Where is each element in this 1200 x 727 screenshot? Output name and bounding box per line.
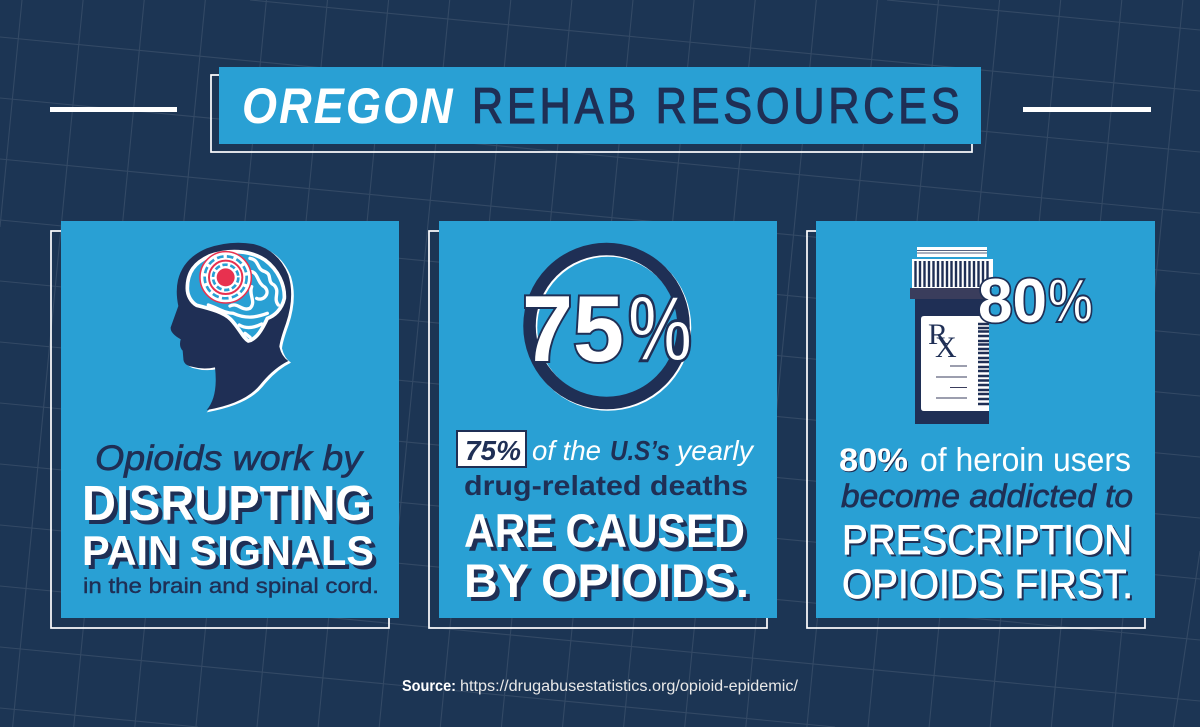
icon: prescription bottle <box>910 247 993 424</box>
text: are caused by opioids: ARE CAUSED <box>464 504 745 557</box>
text: disrupting pain signals: DISRUPTING <box>82 477 372 531</box>
icon: prescription bottle: R <box>928 318 948 351</box>
text: of the U.S's yearly <box>532 435 755 466</box>
title: Rehab Resources: REHAB RESOURCES <box>472 78 960 134</box>
left title rule <box>50 107 177 112</box>
source line: Source: <box>402 678 456 695</box>
source line: https://drugabusestatistics.org/opioid-epidemic/ <box>460 678 799 695</box>
big stat: 75%: 75 <box>522 276 624 381</box>
title: Oregon: OREGON <box>242 79 454 135</box>
text: are caused by opioids: BY OPIOIDS. <box>464 554 749 607</box>
ring graphic <box>530 249 685 404</box>
text: 80% of heroin users: of heroin users <box>920 441 1131 478</box>
big stat: 75% <box>522 276 692 381</box>
text: opioids work by: Opioids work by <box>95 439 365 478</box>
big stat: 80% <box>978 267 1093 336</box>
text: prescription opioids first: OPIOIDS FIRST. <box>842 561 1133 607</box>
icon: head with brain <box>171 243 294 412</box>
panel: disrupting pain signals <box>51 221 399 628</box>
icon: prescription bottle: X <box>935 331 957 364</box>
text: 80% of heroin users: 80% <box>839 442 908 478</box>
big stat: 80%: % <box>1048 267 1093 336</box>
text: of the U.S's yearly: U.S’s <box>610 435 670 466</box>
highlighted 75% box: 75% <box>465 435 521 466</box>
big stat: 75%: % <box>628 276 692 381</box>
title banner <box>211 67 981 152</box>
text: of the U.S's yearly: yearly <box>675 435 755 466</box>
text: drug-related deaths: drug-related deaths <box>464 470 748 501</box>
text: are caused by opioids <box>464 504 749 607</box>
text: prescription opioids first <box>842 516 1133 607</box>
text: disrupting pain signals <box>82 477 374 574</box>
panel: 75 percent of deaths <box>429 221 777 628</box>
text: in the brain and spinal cord: in the brain and spinal cord. <box>83 575 379 598</box>
right title rule <box>1023 107 1151 112</box>
big stat: 80%: 80 <box>978 267 1047 336</box>
panel: 80 percent of heroin users <box>807 221 1155 628</box>
highlighted 75% box <box>457 431 526 467</box>
text: of the U.S's yearly: of the <box>532 435 601 466</box>
text: become addicted to: become addicted to <box>841 478 1133 514</box>
text: prescription opioids first: PRESCRIPTION <box>842 516 1132 563</box>
text: disrupting pain signals: PAIN SIGNALS <box>82 527 374 574</box>
